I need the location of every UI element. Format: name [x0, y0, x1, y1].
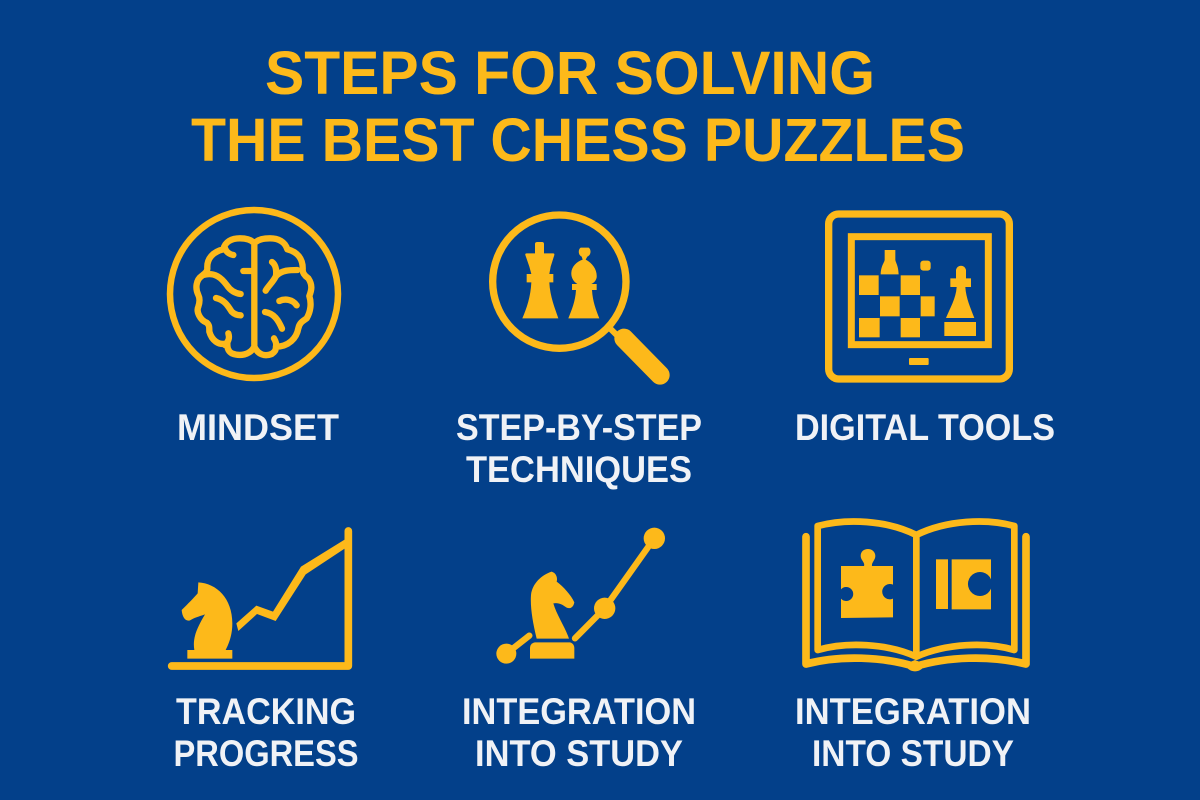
- bishop: [568, 248, 599, 318]
- title: THE BEST CHESS PUZZLES: [191, 106, 965, 174]
- king: [522, 242, 558, 318]
- label: step-by-step techniques: [456, 407, 702, 490]
- icon: knight with rising progress chart: [172, 531, 348, 666]
- title: STEPS FOR SOLVING: [265, 39, 875, 107]
- icon: tablet with chess board: [829, 214, 1009, 379]
- label: integration into study (right): [795, 691, 1031, 774]
- label: tracking progress: PROGRESS: [174, 733, 358, 774]
- puzzle piece right bar: [936, 559, 948, 609]
- knight: [182, 582, 232, 659]
- title: [191, 39, 965, 174]
- label: integration into study (center): INTEGRATION: [462, 691, 696, 732]
- label: integration into study (center): [462, 691, 696, 774]
- label: integration into study (center): INTO STUDY: [475, 733, 683, 774]
- label: integration into study (right): INTEGRATION: [795, 691, 1031, 732]
- label: integration into study (right): INTO STUDY: [812, 733, 1014, 774]
- label: step-by-step techniques: STEP-BY-STEP: [456, 407, 702, 448]
- icon: magnifying glass with king and bishop: [493, 215, 660, 375]
- icon: brain in circle: [170, 210, 338, 378]
- label: digital tools: DIGITAL TOOLS: [795, 407, 1055, 448]
- icon: open book with puzzle pieces: [806, 522, 1026, 671]
- label: tracking progress: TRACKING: [176, 691, 356, 732]
- puzzle piece left: [841, 549, 893, 618]
- label: step-by-step techniques: TECHNIQUES: [466, 449, 692, 490]
- icon: knight with connected nodes: [496, 528, 665, 664]
- label: mindset: MINDSET: [177, 407, 339, 448]
- label: tracking progress: [174, 691, 358, 774]
- knight: [531, 572, 574, 639]
